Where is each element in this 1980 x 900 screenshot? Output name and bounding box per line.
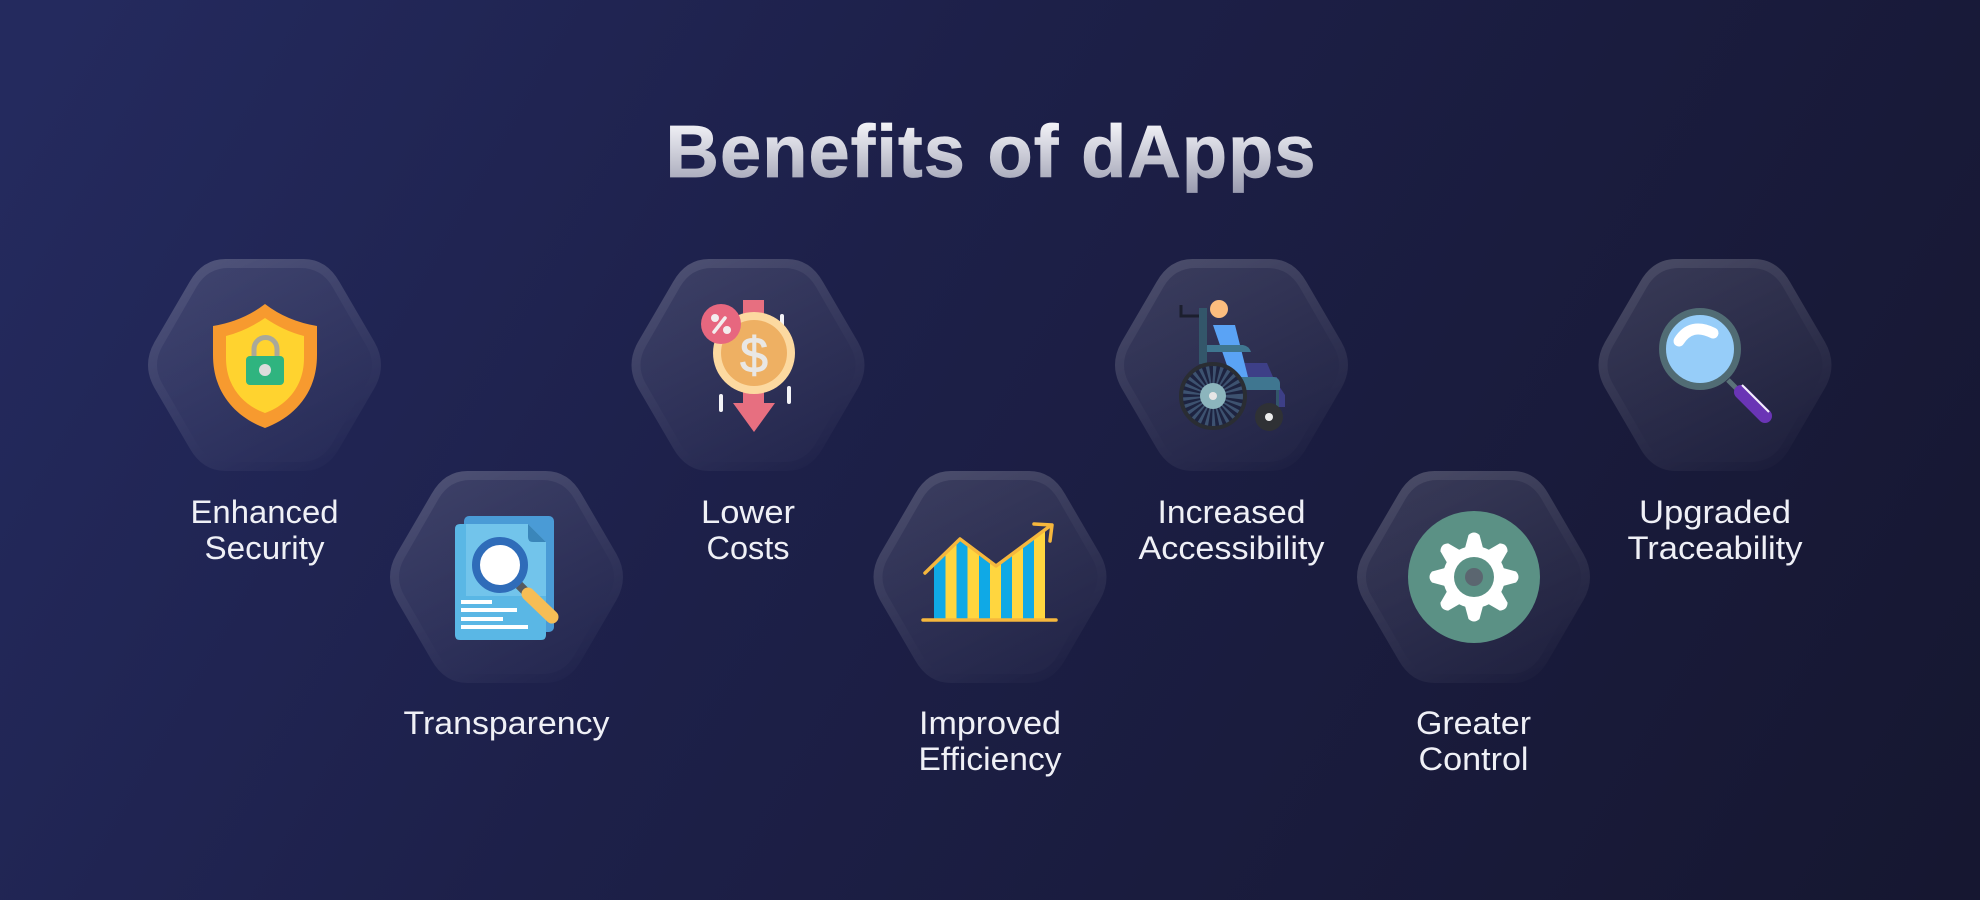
label: Improved Efficiency: Improved	[919, 705, 1061, 741]
icon: document with magnifier	[455, 516, 554, 640]
panel: Enhanced Security	[148, 259, 381, 566]
hexagon badge: Improved Efficiency	[874, 471, 1106, 683]
icon: rising bar chart	[923, 524, 1056, 620]
panel: Increased Accessibility	[1115, 259, 1348, 566]
label: Lower Costs: Lower	[701, 494, 795, 530]
icon: gear	[1408, 511, 1540, 643]
hexagon badge: Lower Costs	[632, 259, 864, 471]
hexagon badge: Increased Accessibility	[1115, 259, 1348, 471]
label: Transparency: Transparency	[404, 705, 610, 741]
label: Upgraded Traceability: Traceability	[1628, 530, 1802, 566]
panel: Transparency	[390, 471, 623, 741]
label: Enhanced Security: Security	[204, 530, 324, 566]
label: Enhanced Security: Enhanced	[190, 494, 338, 530]
hexagon badge: Enhanced Security	[148, 259, 381, 471]
hexagon badge: Transparency	[390, 471, 623, 683]
label: Lower Costs: Costs	[706, 530, 790, 566]
hexagon badge: Greater Control	[1357, 471, 1590, 683]
panel: Upgraded Traceability	[1598, 259, 1832, 566]
label: Greater Control: Greater	[1416, 705, 1531, 741]
label: Upgraded Traceability: Upgraded	[1639, 494, 1791, 530]
panel: Lower Costs	[632, 259, 864, 566]
icon: falling cost coin	[701, 300, 795, 432]
panel: Greater Control	[1357, 471, 1590, 777]
icon: falling cost coin: $	[740, 327, 768, 383]
label: Increased Accessibility: Accessibility	[1138, 530, 1324, 566]
panel: Improved Efficiency	[874, 471, 1106, 777]
icon: shield with padlock	[213, 304, 317, 428]
title: Benefits of dApps	[666, 110, 1316, 193]
label: Increased Accessibility: Increased	[1158, 494, 1306, 530]
label: Improved Efficiency: Efficiency	[918, 741, 1062, 777]
label: Greater Control: Control	[1418, 741, 1528, 777]
hexagon badge: Upgraded Traceability	[1598, 259, 1832, 471]
icon: wheelchair	[1181, 300, 1285, 431]
icon: magnifying glass	[1662, 312, 1769, 416]
